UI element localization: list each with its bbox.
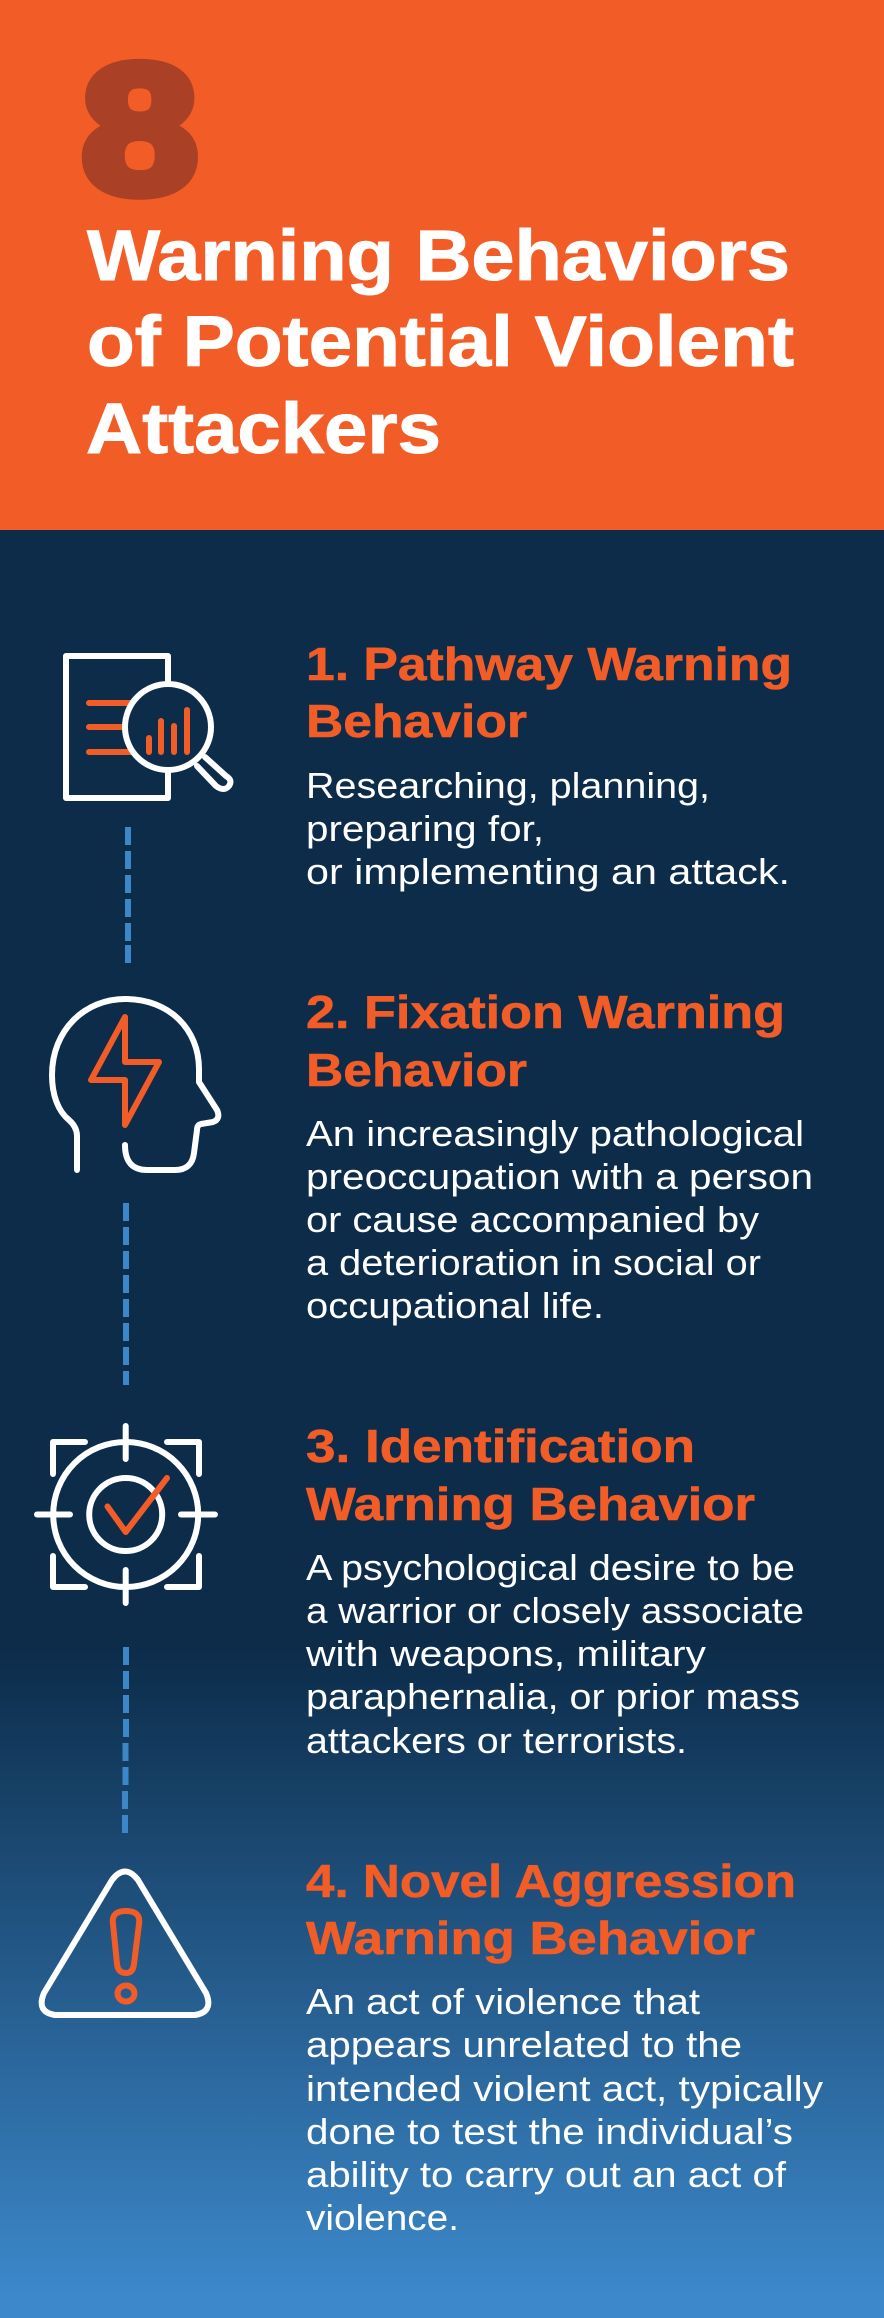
body 2: or cause accompanied by — [306, 1199, 759, 1240]
title: Warning Behaviors — [87, 217, 790, 296]
connector: dashed line 1 — [125, 827, 131, 963]
connector: dashed line 3 — [122, 1647, 129, 1833]
heading 3: Warning Behavior — [306, 1478, 755, 1530]
body 4: done to test the individual’s — [306, 2111, 793, 2152]
icon: target with check mark — [37, 1426, 215, 1603]
connector: dashed line 2 — [123, 1203, 129, 1385]
body 4: An act of violence that — [306, 1981, 700, 2022]
body 3: attackers or terrorists. — [306, 1720, 687, 1761]
body 2: occupational life. — [306, 1285, 604, 1326]
heading 4: Warning Behavior — [306, 1912, 755, 1964]
body 4: violence. — [306, 2197, 459, 2238]
body 1 — [306, 765, 790, 892]
panel: dark gradient background — [0, 530, 884, 2318]
big number 8: 8 — [82, 27, 198, 231]
icon: warning triangle with exclamation mark — [42, 1872, 208, 2015]
title: of Potential Violent — [87, 303, 794, 382]
body 3 — [305, 1547, 804, 1761]
body 1: Researching, planning, — [306, 765, 710, 806]
heading 2: 2. Fixation Warning — [306, 986, 785, 1038]
heading 4 — [306, 1855, 796, 1964]
heading 2 — [306, 986, 785, 1096]
body 1: or implementing an attack. — [306, 851, 790, 892]
body 3: paraphernalia, or prior mass — [306, 1676, 800, 1717]
heading 3 — [306, 1420, 755, 1530]
heading 4: 4. Novel Aggression — [306, 1855, 796, 1907]
body 4: intended violent act, typically — [306, 2068, 823, 2109]
heading 1 — [306, 638, 792, 747]
heading 1: 1. Pathway Warning — [306, 638, 792, 690]
body 4: appears unrelated to the — [306, 2024, 742, 2065]
body 4 — [306, 1981, 823, 2238]
heading 1: Behavior — [306, 695, 527, 747]
body 4: ability to carry out an act of — [306, 2154, 787, 2195]
body 2: An increasingly pathological — [306, 1113, 804, 1154]
body 3: A psychological desire to be — [306, 1547, 795, 1588]
header panel — [0, 0, 884, 530]
body 2: preoccupation with a person — [306, 1156, 813, 1197]
icon: head with lightning bolt — [52, 999, 218, 1170]
item 4 text — [306, 1855, 823, 2238]
heading 2: Behavior — [306, 1044, 527, 1096]
heading 3: 3. Identification — [306, 1420, 695, 1472]
title: Attackers — [86, 390, 441, 469]
body 3: with weapons, military — [305, 1633, 706, 1674]
body 2 — [306, 1113, 813, 1326]
item 1 text — [306, 638, 792, 892]
icon: document with magnifying glass — [66, 656, 230, 798]
body 1: preparing for, — [306, 808, 544, 849]
item 3 text — [305, 1420, 804, 1761]
body 2: a deterioration in social or — [306, 1242, 761, 1283]
item 2 text — [306, 986, 813, 1326]
title — [86, 217, 794, 469]
body 3: a warrior or closely associate — [306, 1590, 804, 1631]
